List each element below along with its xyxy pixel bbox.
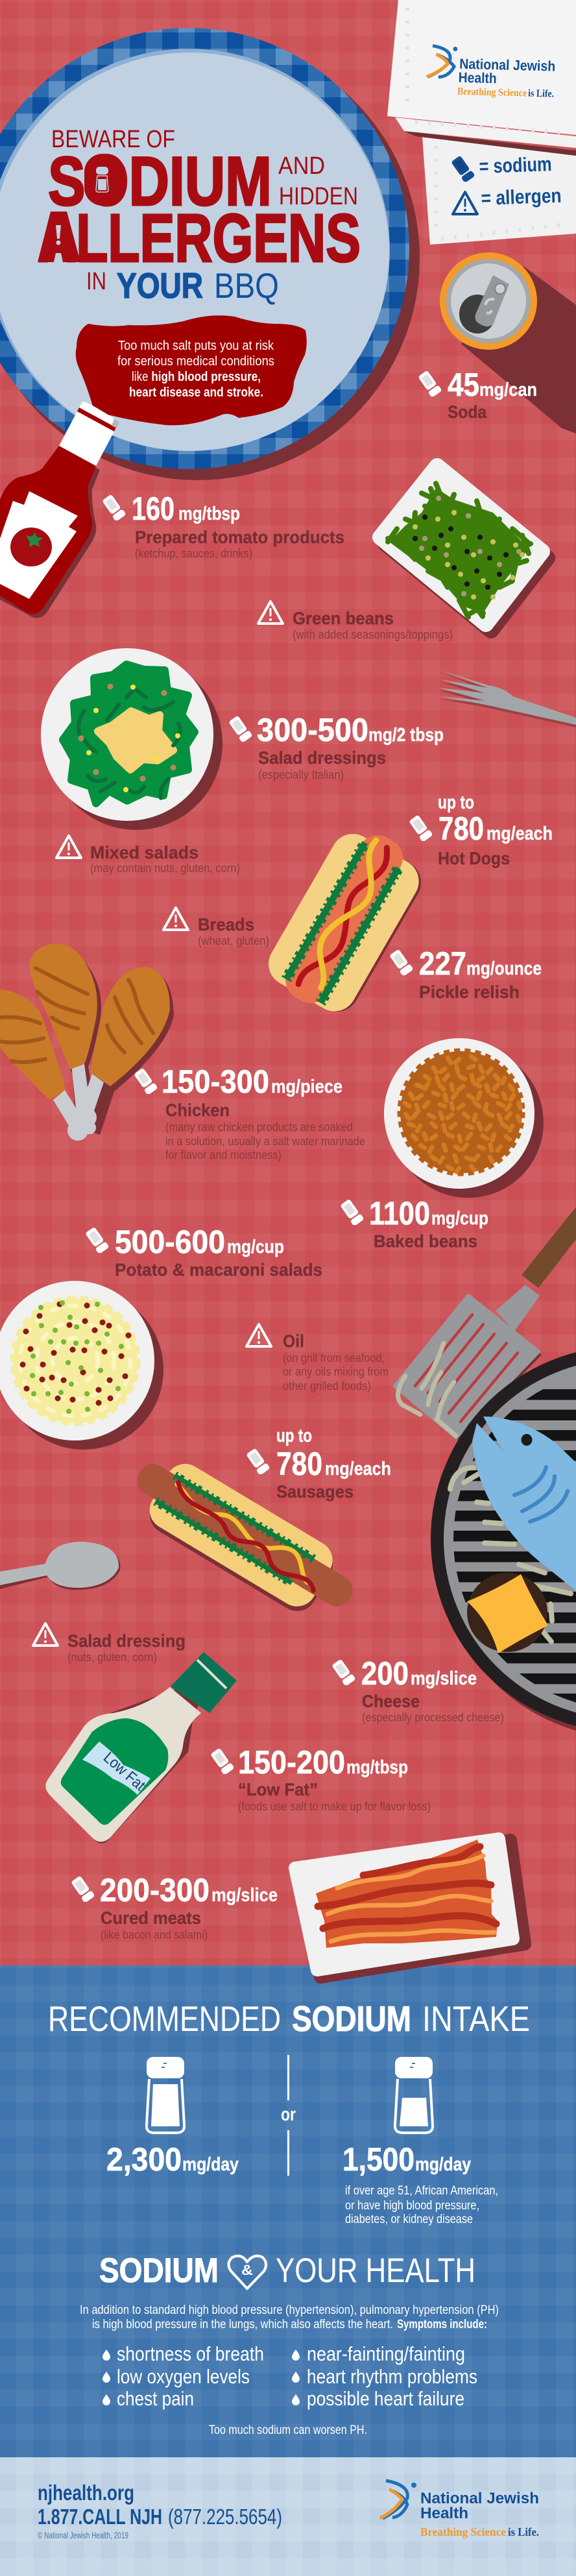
label: pickle relish: 227 <box>419 945 466 982</box>
heading: sodium and your health: YOUR HEALTH <box>276 2252 475 2290</box>
stat: 2,300 mg per day: 2,300 <box>106 2141 182 2178</box>
heading: sodium and your health: SODIUM <box>99 2252 219 2290</box>
icon: salad plate <box>41 648 222 830</box>
label: hot dogs: 780 <box>438 810 484 847</box>
icon: sausage in bun <box>119 1444 367 1633</box>
logo: National Jewish Health top: Health <box>458 69 497 86</box>
callout: ketchup splat <box>76 315 307 425</box>
stat: 2,300 mg per day: mg/day <box>182 2154 239 2175</box>
label: tomato products: 160 <box>132 491 174 527</box>
label: sausages: 780 <box>276 1446 322 1482</box>
icon: spoon <box>0 1542 120 1590</box>
icon: low fat dressing bottle <box>45 1652 237 1843</box>
logo: National Jewish Health top: Breathing Science <box>457 86 527 99</box>
text block: pulmonary hypertension: is high blood pressure in the lungs, which also affects the heart. <box>92 2318 393 2331</box>
icon: chicken drumsticks <box>0 943 174 1141</box>
logo: National Jewish Health top: is Life. <box>528 88 554 99</box>
label: hot dogs: Hot Dogs <box>438 849 510 868</box>
title: YOUR <box>117 265 203 306</box>
footer: contact: njhealth.org <box>38 2481 134 2505</box>
icon: exclamation in A <box>38 212 80 262</box>
logo: National Jewish Health top: National Jewish <box>459 56 556 75</box>
panel: title plate <box>0 28 420 480</box>
label: low fat: 150-200 <box>238 1744 345 1780</box>
legend: allergen <box>453 184 562 214</box>
label: baked beans <box>339 1195 488 1251</box>
label: low fat: “Low Fat” <box>238 1780 318 1799</box>
label: oil: or any oils mixing from <box>283 1365 389 1378</box>
heading: recommended sodium intake: INTAKE <box>422 1999 530 2039</box>
label: breads <box>163 908 269 947</box>
icon: potato salad plate <box>0 1281 163 1450</box>
divider with or <box>281 2055 296 2176</box>
logo: National Jewish Health top <box>426 45 556 99</box>
list: symptoms: low oxygen levels <box>117 2365 250 2388</box>
label: low fat: mg/tbsp <box>346 1757 408 1778</box>
label: mixed salads <box>56 836 240 875</box>
label: salad dressings <box>228 712 444 781</box>
label: sausages: Sausages <box>276 1482 354 1501</box>
label: chicken <box>133 1063 365 1161</box>
callout: ketchup splat: heart disease and stroke. <box>129 385 263 400</box>
label: pickle relish: mg/ounce <box>466 958 542 979</box>
label: salad dressings: (especially Italian) <box>258 768 344 781</box>
callout: ketchup splat: Too much salt puts you at risk <box>118 339 274 353</box>
label: hot dogs: mg/each <box>486 823 553 844</box>
label: oil: (on grill from seafood, <box>283 1352 385 1365</box>
label: breads: Breads <box>198 915 254 934</box>
stat: 1,500 mg per day: if over age 51, African American, <box>345 2184 498 2198</box>
label: cheese <box>331 1655 504 1724</box>
label: cured meats: mg/slice <box>211 1885 278 1906</box>
label: oil: Oil <box>283 1331 304 1351</box>
list: symptoms: possible heart failure <box>307 2387 464 2410</box>
stat: 1,500 mg per day: 1,500 <box>342 2141 414 2178</box>
label: baked beans: mg/cup <box>431 1208 488 1229</box>
label: soda: 45 <box>448 367 479 403</box>
label: cured meats: 200-300 <box>100 1872 210 1908</box>
background: red tablecloth <box>0 0 576 1965</box>
label: chicken: Chicken <box>165 1100 230 1120</box>
background: red plaid <box>0 0 576 1965</box>
icon: spatula <box>395 1207 576 1440</box>
icon: soda can <box>440 252 576 433</box>
title: ALLERGENS <box>38 200 361 276</box>
label: low fat: (foods use salt to make up for flavor loss) <box>238 1800 431 1813</box>
label: cured meats <box>70 1872 278 1941</box>
title: SODIUM <box>48 142 272 220</box>
title: IN <box>86 268 106 295</box>
label: cured meats: (like bacon and salami) <box>101 1928 208 1941</box>
label: soda <box>417 367 537 422</box>
background: footer plaid <box>0 2457 576 2576</box>
footer: logo: is Life. <box>508 2525 539 2538</box>
stat: 1,500 mg per day <box>342 2141 498 2226</box>
footer: logo <box>380 2481 539 2538</box>
heading: sodium and your health <box>99 2252 475 2290</box>
label: soda: Soda <box>448 402 487 422</box>
title: BBQ <box>214 265 279 306</box>
icon: burger with cheese <box>467 1573 548 1653</box>
icon: low fat dressing bottle: Low Fat <box>100 1749 149 1795</box>
label: oil <box>246 1324 389 1392</box>
stat: 1,500 mg per day: or have high blood pressure, <box>345 2199 479 2213</box>
label: breads: (wheat, gluten) <box>198 934 269 947</box>
label: potato and macaroni salads: 500-600 <box>115 1224 225 1260</box>
label: chicken: in a solution, usually a salt water marinade <box>165 1135 365 1148</box>
label: soda: mg/can <box>479 380 537 400</box>
label: cheese: mg/slice <box>411 1668 477 1689</box>
label: salad dressing allergen <box>33 1623 186 1664</box>
stat: 1,500 mg per day: diabetes, or kidney disease <box>345 2213 473 2226</box>
footer: logo: Breathing Science <box>420 2525 506 2538</box>
icon: hot dog <box>258 816 435 1025</box>
heading: recommended sodium intake: SODIUM <box>292 1999 411 2039</box>
label: hot dogs <box>408 792 553 868</box>
label: potato and macaroni salads: mg/cup <box>227 1237 284 1258</box>
icon: baked beans plate <box>384 1038 544 1198</box>
label: baked beans: Baked beans <box>374 1232 477 1251</box>
list: symptoms: shortness of breath <box>117 2342 264 2365</box>
list: symptoms: near-fainting/fainting <box>307 2342 465 2365</box>
label: mixed salads: (may contain nuts, gluten, corn) <box>90 862 240 875</box>
icon: half salt shaker <box>395 2057 433 2133</box>
title <box>38 126 361 306</box>
background: footer band <box>0 2457 576 2576</box>
icon: bacon tray <box>295 1839 525 1977</box>
list: symptoms: heart rhythm problems <box>307 2365 477 2388</box>
text: too much sodium can worsen PH: Too much sodium can worsen PH. <box>209 2424 367 2437</box>
icon: ketchup bottle <box>0 402 119 618</box>
text block: pulmonary hypertension <box>80 2303 499 2331</box>
label: tomato products: mg/tbsp <box>178 504 240 524</box>
footer: contact: 1.877.CALL NJH <box>38 2505 162 2529</box>
heading: recommended sodium intake: RECOMMENDED <box>48 1999 281 2039</box>
label: cured meats: Cured meats <box>101 1908 201 1928</box>
legend: sodium: = sodium <box>479 152 552 178</box>
title: HIDDEN <box>279 183 358 210</box>
label: mixed salads: Mixed salads <box>90 843 198 862</box>
label: potato and macaroni salads: Potato & macaroni salads <box>115 1260 322 1280</box>
title: BEWARE OF <box>51 126 175 153</box>
label: chicken: (many raw chicken products are soaked <box>165 1121 353 1134</box>
label: tomato products <box>101 491 344 560</box>
label: pickle relish: Pickle relish <box>419 982 520 1002</box>
label: salad dressing allergen: (nuts, gluten, corn) <box>67 1651 157 1664</box>
footer: contact: (877.225.5654) <box>168 2505 282 2529</box>
background: blue section <box>0 1965 576 2457</box>
label: chicken: mg/piece <box>271 1076 342 1097</box>
label: cheese: Cheese <box>362 1692 420 1711</box>
label: salad dressing allergen: Salad dressing <box>67 1631 186 1651</box>
label: pickle relish <box>389 945 542 1002</box>
footer: contact: © National Jewish Health, 2019 <box>38 2530 128 2540</box>
label: hot dogs: up to <box>438 792 474 813</box>
list: symptoms <box>102 2342 477 2410</box>
footer: logo: National Jewish <box>420 2490 539 2507</box>
label: sausages: mg/each <box>325 1459 391 1479</box>
legend: allergen: = allergen <box>481 184 562 210</box>
text block: pulmonary hypertension: Symptoms include: <box>397 2318 487 2331</box>
text block: pulmonary hypertension: In addition to standard high blood pressure (hypertension), pulmonary hypertension (PH) <box>80 2303 499 2317</box>
divider with or: or <box>281 2104 296 2125</box>
footer: contact <box>38 2481 282 2540</box>
label: sausages <box>245 1426 391 1501</box>
legend napkins and logo <box>387 0 576 245</box>
background: blue plaid <box>0 1965 576 2457</box>
label: green beans: Green beans <box>293 609 394 628</box>
label: cheese: (especially processed cheese) <box>362 1711 504 1724</box>
stat: 1,500 mg per day: mg/day <box>415 2154 471 2175</box>
heading: sodium and your health: & <box>241 2262 253 2278</box>
label: chicken: 150-300 <box>162 1063 269 1100</box>
list: symptoms: chest pain <box>117 2387 194 2410</box>
footer: logo: Health <box>420 2505 468 2522</box>
callout: ketchup splat: for serious medical conditions <box>117 354 274 369</box>
label: cheese: 200 <box>361 1655 409 1692</box>
icon: fish <box>472 1416 576 1591</box>
icon: green beans plate <box>380 466 547 631</box>
label: chicken: for flavor and moistness) <box>165 1148 282 1161</box>
legend: sodium <box>450 152 552 183</box>
label: green beans <box>258 601 453 641</box>
heading: recommended sodium intake <box>48 1999 530 2039</box>
icon: salt shaker in O <box>84 154 125 206</box>
icon: fork <box>438 670 576 727</box>
icon: full salt shaker <box>147 2057 184 2133</box>
label: sausages: up to <box>276 1426 312 1446</box>
stat: 2,300 mg per day <box>106 2141 239 2178</box>
icon: grill with fish and burger <box>431 1346 576 1738</box>
label: green beans: (with added seasonings/toppings) <box>293 628 453 641</box>
label: salad dressings: mg/2 tbsp <box>368 725 444 746</box>
label: oil: other grilled foods) <box>283 1379 371 1392</box>
label: low fat <box>210 1744 431 1813</box>
label: baked beans: 1100 <box>369 1195 430 1232</box>
title: AND <box>278 152 325 180</box>
label: salad dressings: Salad dressings <box>258 748 386 768</box>
label: potato and macaroni salads <box>84 1224 322 1280</box>
label: tomato products: Prepared tomato products <box>135 528 344 547</box>
label: salad dressings: 300-500 <box>257 712 368 748</box>
callout: ketchup splat: like high blood pressure, <box>132 370 261 384</box>
label: tomato products: (ketchup, sauces, drinks) <box>135 547 252 560</box>
